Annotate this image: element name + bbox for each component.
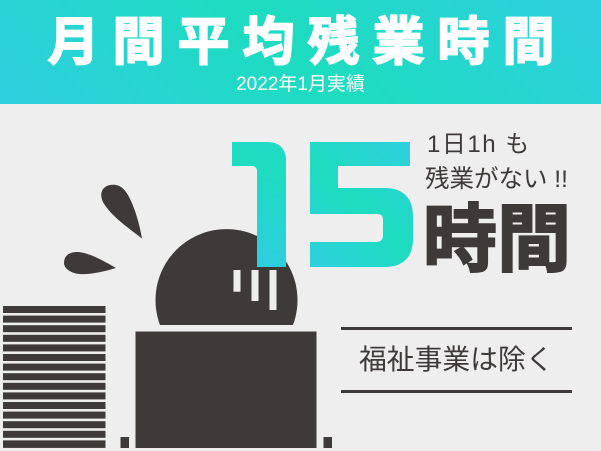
caption: no overtime: 残業がない !!: [425, 165, 568, 193]
head: [156, 229, 298, 325]
desk foot right: [324, 437, 332, 448]
desk foot left: [120, 437, 129, 448]
note text: 福祉事業は除く: [359, 344, 554, 375]
icon: sweat drop lower: [64, 252, 116, 274]
big number 15: [232, 142, 413, 267]
illustration: overworked person at desk: [3, 185, 332, 448]
unit: hours: 時間: [423, 198, 571, 281]
caption: not even 1h per day: 1日1h も: [427, 131, 531, 158]
digit 1: [232, 142, 286, 267]
desk: [136, 332, 316, 448]
paper stack: [3, 306, 106, 448]
digit 5: [310, 142, 413, 267]
icon: worry lines on head: [234, 270, 276, 310]
title: 月間平均残業時間: [48, 14, 568, 72]
header panel: [0, 0, 601, 104]
icon: sweat drop upper: [101, 185, 142, 238]
note with rules: [341, 327, 572, 393]
subtitle: 2022年1月実績: [236, 73, 365, 95]
